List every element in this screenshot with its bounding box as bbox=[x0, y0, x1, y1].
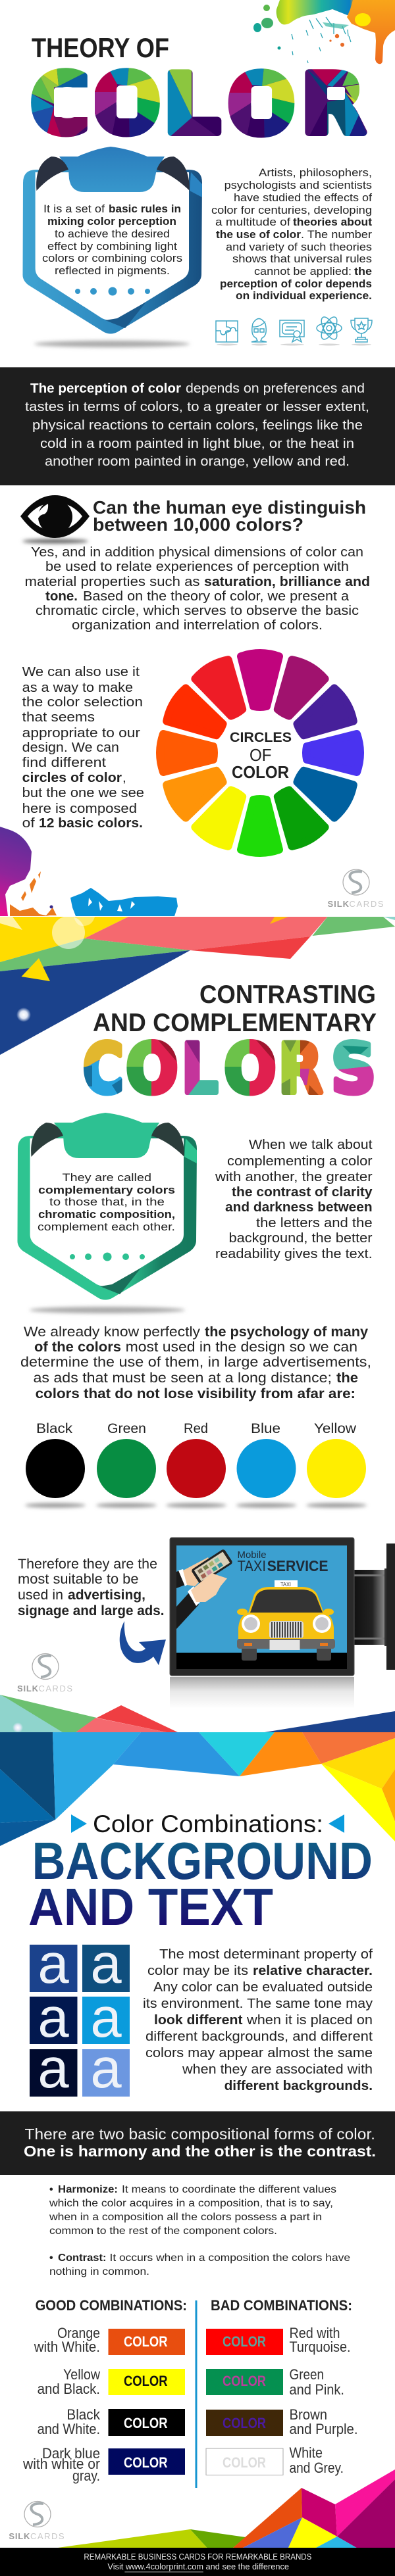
text block: harmonize: It means to coordinate the different values bbox=[122, 2184, 336, 2195]
text block: circles of color explanation: We can also use it bbox=[22, 664, 140, 679]
polygon banner bbox=[0, 1732, 395, 1846]
divider bbox=[195, 2300, 198, 2488]
text block: complementing a color: background, the better bbox=[229, 1231, 373, 1246]
text block: complementing a color: When we talk about bbox=[249, 1138, 373, 1152]
icon: eye bbox=[20, 495, 90, 543]
badge text: mixing color perception bbox=[47, 216, 176, 228]
text block: relative character: color may be its bbox=[147, 1963, 248, 1978]
badge text: colors or combining colors bbox=[42, 253, 182, 264]
heading: human eye question: between 10,000 colors? bbox=[93, 514, 303, 535]
tile: cyan: a bbox=[90, 1987, 122, 2049]
text block: relative character: colors may appear almost the same bbox=[145, 2045, 373, 2060]
tile: navy: a bbox=[38, 1987, 69, 2049]
row: dark blue with white or gray: COLOR bbox=[124, 2454, 168, 2471]
text block: artists and philosophers: a multitude of bbox=[215, 216, 290, 228]
text block: artists and philosophers: on individual experience. bbox=[236, 289, 372, 302]
panel: dark perception band bbox=[0, 367, 395, 485]
badge shadow bbox=[34, 341, 190, 347]
text block: yes and in addition: organization and interrelation of colors. bbox=[72, 618, 323, 633]
badge shadow bbox=[30, 1307, 185, 1313]
badge text: They are called bbox=[62, 1172, 151, 1184]
logo: SilkCards top right bbox=[328, 869, 384, 909]
text block: artists and philosophers: the use of color bbox=[216, 228, 301, 241]
text block: circles of color explanation: design. We can bbox=[22, 740, 119, 755]
text block: yes and in addition bbox=[25, 545, 370, 633]
row: dark blue with white or gray bbox=[22, 2445, 185, 2484]
logo: SilkCards middle: SILK bbox=[17, 1684, 39, 1693]
title: COLORS polygon letters: R bbox=[278, 1030, 323, 1109]
text block: relative character: different backgrounds. bbox=[224, 2078, 373, 2093]
text block: harmonize bbox=[49, 2184, 336, 2237]
text block: artists and philosophers: perception of color depends bbox=[220, 278, 372, 290]
badge text: basic rules in bbox=[109, 203, 181, 215]
text block: complementing a color bbox=[215, 1138, 373, 1261]
swatch: blue: Blue bbox=[251, 1421, 280, 1436]
panel: dark perception band: physical reactions to certain colors, feelings like the bbox=[32, 418, 363, 433]
text block: artists and philosophers bbox=[211, 166, 372, 302]
row: red with turquoise bbox=[206, 2325, 350, 2355]
row: red with turquoise: Red with bbox=[290, 2325, 340, 2341]
badge text: It is a set of bbox=[43, 203, 105, 215]
swatch: red bbox=[166, 1421, 226, 1507]
heading: good combinations: GOOD COMBINATIONS: bbox=[36, 2297, 187, 2314]
text block: relative character: The most determinant property of bbox=[159, 1947, 373, 1962]
text block: yes and in addition: tone. bbox=[45, 589, 78, 604]
icon: certificate bbox=[280, 320, 304, 342]
title: THEORY OF: THEORY OF bbox=[32, 32, 169, 63]
row: white and grey: COLOR bbox=[223, 2454, 266, 2471]
logo: SilkCards bottom: CARDS bbox=[30, 2531, 65, 2541]
logo: SilkCards bottom: SILK bbox=[9, 2531, 30, 2541]
badge text: chromatic composition, bbox=[38, 1209, 175, 1221]
row: brown and purple bbox=[206, 2406, 358, 2437]
title: COLORS polygon letters: S bbox=[331, 1030, 376, 1109]
title: COLOR polygon letters: O bbox=[228, 59, 295, 153]
title: COLOR polygon letters: R bbox=[302, 58, 365, 152]
row: orange with white bbox=[34, 2325, 185, 2355]
text block: harmonize: Harmonize: bbox=[58, 2184, 118, 2195]
panel: dark perception band: The perception of color bbox=[30, 381, 181, 396]
row: yellow and black: and Black. bbox=[38, 2381, 100, 2397]
title: COLORS polygon letters: C bbox=[83, 1030, 124, 1109]
title: COLORS polygon letters bbox=[83, 1030, 376, 1109]
text block: contrast: Contrast: bbox=[58, 2252, 107, 2264]
swatch: green bbox=[96, 1421, 157, 1507]
title: COLORS polygon letters: O bbox=[224, 1030, 276, 1109]
logo: SilkCards top right: CARDS bbox=[349, 899, 384, 909]
illustration: taxi bbox=[237, 1580, 335, 1661]
row: yellow and black: COLOR bbox=[124, 2373, 168, 2389]
text block: harmonize: • bbox=[49, 2184, 53, 2195]
text block: circles of color explanation: that seems bbox=[22, 710, 95, 725]
text block: circles of color explanation: , bbox=[122, 770, 126, 785]
text block: contrast bbox=[49, 2252, 350, 2277]
text block: artists and philosophers: color for centuries, developing bbox=[211, 204, 372, 216]
badge text: complementary colors bbox=[38, 1184, 175, 1196]
text block: psychology of colors: colors that do not lose visibility from afar are: bbox=[36, 1386, 356, 1401]
text block: signage and large ads: advertising, bbox=[68, 1588, 145, 1603]
row: dark blue with white or gray: Dark blue bbox=[42, 2445, 100, 2462]
badge text: to achieve the desired bbox=[55, 228, 170, 240]
title: COLORS polygon letters: L bbox=[182, 1030, 218, 1109]
swatch: yellow: Yellow bbox=[314, 1421, 357, 1436]
text block: yes and in addition: Yes, and in addition physical dimensions of color can bbox=[31, 545, 363, 560]
swatch: green: Green bbox=[107, 1421, 146, 1436]
badge text: complement each other. bbox=[38, 1221, 175, 1233]
text block: psychology of colors: the psychology of many bbox=[205, 1324, 368, 1340]
row: orange with white: COLOR bbox=[124, 2333, 168, 2350]
row: green and pink: and Pink. bbox=[290, 2381, 344, 2398]
title: COLOR polygon letters: L bbox=[164, 58, 220, 152]
text block: psychology of colors: determine the use of them, in large advertisements, bbox=[20, 1355, 371, 1370]
row: yellow and black: Yellow bbox=[63, 2366, 100, 2383]
row: white and grey: White bbox=[290, 2444, 323, 2461]
text block: yes and in addition: chromatic circle, which serves to observe the basic bbox=[36, 604, 359, 618]
badge text: to those that, in the bbox=[49, 1196, 165, 1208]
logo: SilkCards top right: SILK bbox=[328, 899, 350, 909]
row: orange with white: Orange bbox=[57, 2325, 100, 2341]
text block: artists and philosophers: . The number bbox=[301, 228, 372, 241]
text block: artists and philosophers: have studied the effects of bbox=[234, 191, 372, 204]
panel: good combinations bbox=[22, 2297, 187, 2484]
text block: circles of color explanation bbox=[22, 664, 144, 831]
badge text bbox=[42, 203, 182, 277]
text block: circles of color explanation: 12 basic colors. bbox=[39, 815, 143, 831]
text block: yes and in addition: be used to relate experiences of perception with bbox=[45, 560, 349, 574]
panel: dark perception band: tastes in terms of colors, to a greater or lesser extent, bbox=[25, 400, 369, 414]
tile: blue bbox=[30, 1933, 78, 1995]
billboard text: Mobile bbox=[237, 1549, 266, 1561]
text block: artists and philosophers: Artists, philosophers, bbox=[259, 166, 372, 179]
text block: contrast: nothing in common. bbox=[49, 2266, 149, 2277]
badge dots bbox=[75, 287, 150, 296]
text block: relative character: different backgrounds, and different bbox=[145, 2029, 373, 2044]
wheel center label bbox=[230, 730, 292, 782]
text block: complementing a color: and darkness between bbox=[225, 1200, 373, 1215]
billboard text: SERVICE bbox=[267, 1557, 329, 1574]
billboard mount bbox=[354, 1543, 395, 1670]
heading: contrasting and complementary: AND COMPLEMENTARY bbox=[93, 1009, 377, 1037]
text block: relative character: look different bbox=[154, 2012, 243, 2028]
icon: puzzle bbox=[216, 321, 238, 342]
tile: navy bbox=[30, 1987, 78, 2049]
swatch: black bbox=[25, 1421, 86, 1507]
text block: yes and in addition: Based on the theory of color, we present a bbox=[83, 589, 350, 604]
row: black and white: Black bbox=[66, 2406, 101, 2423]
row: brown and purple: COLOR bbox=[223, 2415, 266, 2431]
text block: circles of color explanation: the color selection bbox=[22, 694, 143, 710]
row: red with turquoise: COLOR bbox=[223, 2333, 266, 2350]
text block: artists and philosophers: psychologists and scientists bbox=[224, 179, 372, 191]
logo: SilkCards middle bbox=[17, 1653, 72, 1693]
decorative shards above color combinations bbox=[0, 1695, 395, 1733]
panel: green shield badge bbox=[17, 1113, 197, 1313]
title: COLOR polygon letters: O bbox=[93, 58, 160, 152]
row: red with turquoise: Turquoise. bbox=[290, 2339, 350, 2355]
wheel center label: COLOR bbox=[232, 762, 289, 782]
badge shape bbox=[22, 147, 202, 334]
title: COLOR polygon letters bbox=[31, 58, 365, 153]
tile: cyan bbox=[82, 1987, 130, 2049]
text block: artists and philosophers: the bbox=[354, 265, 372, 278]
row: dark blue with white or gray: gray. bbox=[72, 2467, 100, 2484]
billboard frame bbox=[170, 1538, 354, 1676]
text block: harmonize: when in a composition all the colors possess a part in bbox=[49, 2212, 322, 2223]
text block: relative character: Any color can be evaluated outside bbox=[153, 1980, 373, 1995]
icon row bbox=[216, 315, 372, 346]
arrow bbox=[120, 1621, 166, 1665]
panel: dark perception band: depends on preferences and bbox=[186, 381, 365, 396]
text block: complementing a color: complementing a color bbox=[227, 1154, 373, 1169]
text block: complementing a color: with another, the greater bbox=[215, 1170, 373, 1184]
paint splash left bbox=[0, 827, 178, 916]
row: yellow and black bbox=[38, 2366, 185, 2397]
row: dark blue with white or gray: with white or bbox=[22, 2456, 100, 2472]
paint splash top right bbox=[253, 0, 395, 64]
badge text: effect by combining light bbox=[47, 241, 177, 253]
wheel center label: OF bbox=[250, 745, 271, 765]
swatch: yellow bbox=[306, 1421, 367, 1507]
panel: dark perception band: another room painted in orange, yellow and red. bbox=[45, 454, 350, 469]
row: white and grey bbox=[206, 2444, 344, 2476]
text block: complementing a color: the contrast of clarity bbox=[232, 1185, 373, 1200]
billboard: mobile taxi service bbox=[170, 1538, 395, 1709]
text block: circles of color explanation: but the one we see bbox=[22, 785, 144, 800]
text block: contrast: It occurs when in a composition the colors have bbox=[109, 2252, 350, 2264]
text block: signage and large ads bbox=[18, 1557, 165, 1618]
billboard text bbox=[237, 1549, 329, 1574]
letter tile grid bbox=[30, 1933, 130, 2100]
panel: dark compositional forms band: One is harmony and the other is the contrast. bbox=[24, 2143, 376, 2160]
text block: artists and philosophers: cannot be applied: bbox=[254, 265, 352, 278]
heading: background and text: AND TEXT bbox=[28, 1878, 273, 1936]
row: black and white bbox=[38, 2406, 185, 2437]
text block: psychology of colors: most used in the design so we can bbox=[126, 1340, 357, 1355]
billboard screen bbox=[176, 1545, 347, 1669]
icon: scientist head bbox=[251, 318, 267, 342]
panel: dark perception band: cold in a room painted in light blue, or the heat in bbox=[40, 437, 354, 451]
heading: human eye question bbox=[93, 497, 366, 535]
billboard text: TAXI bbox=[237, 1557, 266, 1574]
chart: color wheel bbox=[160, 653, 360, 853]
logo: SilkCards middle: CARDS bbox=[38, 1684, 72, 1693]
row: green and pink: COLOR bbox=[223, 2373, 266, 2389]
heading: bad combinations: BAD COMBINATIONS: bbox=[211, 2297, 352, 2314]
panel: bad combinations bbox=[206, 2297, 358, 2476]
text block: relative character: when they are associated with bbox=[182, 2062, 373, 2077]
swatch: red: Red bbox=[184, 1421, 208, 1436]
footer: Visit www.4colorprint.com and see the difference bbox=[107, 2562, 289, 2571]
heading: contrasting and complementary: CONTRASTING bbox=[199, 981, 376, 1009]
text block: artists and philosophers: theories about bbox=[293, 216, 372, 228]
text block: harmonize: which the color acquires in a composition, that is to say, bbox=[49, 2198, 333, 2209]
text block: circles of color explanation: circles of color bbox=[22, 770, 122, 785]
row: green and pink: Green bbox=[290, 2366, 324, 2383]
wheel center label: CIRCLES bbox=[230, 730, 292, 745]
logo: SilkCards bottom bbox=[9, 2502, 65, 2541]
text block: psychology of colors: the bbox=[336, 1371, 358, 1386]
text block: complementing a color: the letters and the bbox=[256, 1216, 373, 1230]
text block: circles of color explanation: appropriate to our bbox=[22, 725, 140, 741]
badge text: reflected in pigments. bbox=[55, 265, 170, 277]
panel: blue shield badge bbox=[22, 147, 202, 347]
decorative shards bottom bbox=[58, 2469, 395, 2548]
badge text bbox=[38, 1172, 175, 1233]
row: brown and purple: Brown bbox=[290, 2406, 327, 2423]
row: green and pink bbox=[206, 2366, 344, 2398]
heading: human eye question: Can the human eye distinguish bbox=[93, 497, 366, 518]
decorative shards upper section bbox=[0, 916, 395, 1055]
text block: artists and philosophers: shows that universal rules bbox=[232, 253, 372, 265]
tile: periwinkle bbox=[82, 2037, 130, 2100]
tile: midnight: a bbox=[38, 2037, 69, 2100]
row: orange with white: with White. bbox=[34, 2339, 100, 2355]
heading: background and text bbox=[28, 1832, 373, 1936]
text block: psychology of colors: We already know perfectly bbox=[24, 1324, 201, 1340]
text block: yes and in addition: material properties such as bbox=[25, 575, 200, 589]
footer: REMARKABLE BUSINESS CARDS FOR REMARKABLE BRANDS bbox=[84, 2552, 312, 2562]
swatch: black: Black bbox=[36, 1421, 73, 1436]
text block: psychology of colors bbox=[20, 1324, 371, 1401]
badge shape bbox=[17, 1113, 197, 1300]
text block: psychology of colors: as ads that must be seen at a long distance; bbox=[33, 1371, 332, 1386]
billboard reflection bbox=[170, 1677, 354, 1709]
footer bbox=[0, 2548, 395, 2576]
tile: blue: a bbox=[38, 1933, 69, 1995]
illustration: taxi: TAXI bbox=[280, 1582, 291, 1588]
badge dots bbox=[70, 1252, 145, 1261]
swatch: blue bbox=[236, 1421, 296, 1507]
text block: circles of color explanation: as a way to make bbox=[22, 680, 133, 695]
tile: periwinkle: a bbox=[90, 2037, 122, 2100]
heading: color combinations: Color Combinations: bbox=[93, 1810, 323, 1837]
text block: relative character: its environment. The same tone may bbox=[143, 1996, 373, 2011]
text block: circles of color explanation: find different bbox=[22, 755, 106, 770]
text block: harmonize: common to the rest of the component colors. bbox=[49, 2225, 277, 2237]
text block: relative character bbox=[143, 1947, 373, 2093]
text block: relative character: relative character. bbox=[253, 1963, 373, 1978]
text block: circles of color explanation: of bbox=[22, 815, 35, 831]
text block: signage and large ads: used in bbox=[18, 1588, 63, 1603]
heading: contrasting and complementary bbox=[93, 981, 377, 1037]
text block: psychology of colors: of the colors bbox=[34, 1340, 121, 1355]
title: COLOR polygon letters: C bbox=[31, 58, 89, 152]
row: white and grey: and Grey. bbox=[290, 2460, 344, 2476]
title: COLORS polygon letters: O bbox=[126, 1030, 178, 1109]
text block: circles of color explanation: here is composed bbox=[22, 801, 137, 816]
tile: teal blue: a bbox=[90, 1933, 122, 1995]
row: black and white: and White. bbox=[38, 2421, 100, 2437]
row: black and white: COLOR bbox=[124, 2415, 168, 2431]
tile: teal blue bbox=[82, 1933, 130, 1995]
tile: midnight bbox=[30, 2037, 78, 2100]
text block: signage and large ads: Therefore they are the bbox=[18, 1557, 157, 1572]
row: brown and purple: and Purple. bbox=[290, 2421, 358, 2437]
panel: dark compositional forms band: There are two basic compositional forms of color. bbox=[25, 2126, 375, 2143]
text block: contrast: • bbox=[49, 2252, 53, 2264]
color swatch row bbox=[25, 1421, 367, 1507]
icon: trophy bbox=[351, 318, 372, 342]
icon: atom bbox=[317, 315, 342, 341]
text block: complementing a color: readability gives the text. bbox=[215, 1247, 373, 1261]
text block: signage and large ads: most suitable to be bbox=[18, 1572, 138, 1587]
text block: artists and philosophers: and variety of such theories bbox=[226, 241, 372, 253]
text block: relative character: when it is placed on bbox=[246, 2012, 373, 2028]
illustration: hands and phone bbox=[176, 1549, 233, 1629]
text block: signage and large ads: signage and large ads. bbox=[18, 1603, 165, 1618]
panel: dark compositional forms band bbox=[0, 2111, 395, 2175]
text block: yes and in addition: saturation, brilliance and bbox=[204, 575, 370, 589]
